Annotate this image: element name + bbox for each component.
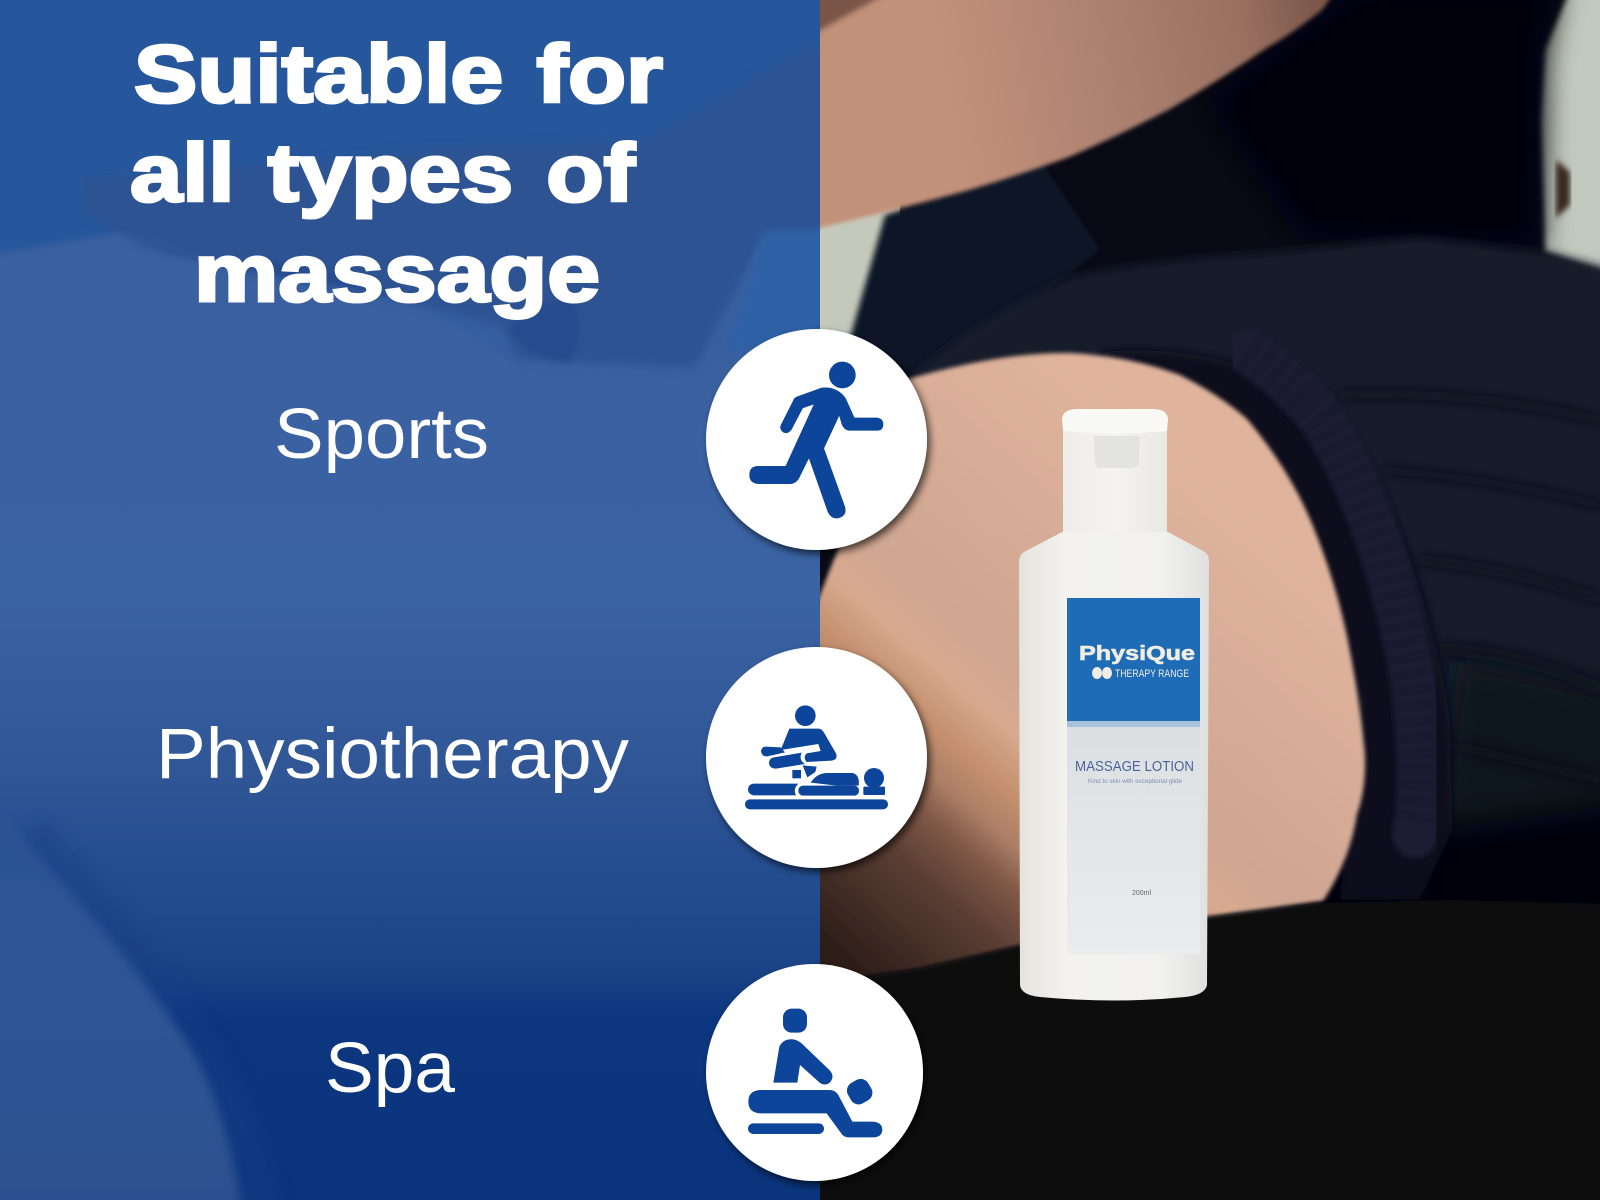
panel: blue tinted photo (left side) bbox=[0, 0, 860, 1200]
bottle label bbox=[1067, 598, 1200, 954]
icon: spa massage badge bbox=[706, 964, 923, 1181]
icon: physiotherapy badge bbox=[706, 647, 927, 868]
title: Suitable for bbox=[134, 29, 663, 120]
label: Spa: Spa bbox=[325, 1029, 456, 1108]
bottle body bbox=[1019, 532, 1209, 1000]
bottle label: MASSAGE LOTION bbox=[1075, 758, 1194, 775]
title: all types of bbox=[130, 128, 636, 219]
title: massage bbox=[194, 228, 600, 319]
icon: sports runner badge bbox=[706, 329, 927, 550]
label: Physiotherapy: Physiotherapy bbox=[156, 715, 630, 794]
bottle label: Kind to skin with exceptional glide bbox=[1088, 778, 1182, 785]
title bbox=[130, 29, 663, 319]
bottle label: 200ml bbox=[1132, 888, 1151, 897]
label: Sports: Sports bbox=[274, 395, 489, 474]
product: massage lotion bottle bbox=[1019, 409, 1209, 1000]
bottle label: THERAPY RANGE bbox=[1115, 668, 1189, 680]
photo: massage scene (right side) bbox=[800, 0, 1600, 1200]
bottle label: PhysiQue bbox=[1079, 643, 1195, 665]
bottle cap bbox=[1062, 409, 1168, 532]
